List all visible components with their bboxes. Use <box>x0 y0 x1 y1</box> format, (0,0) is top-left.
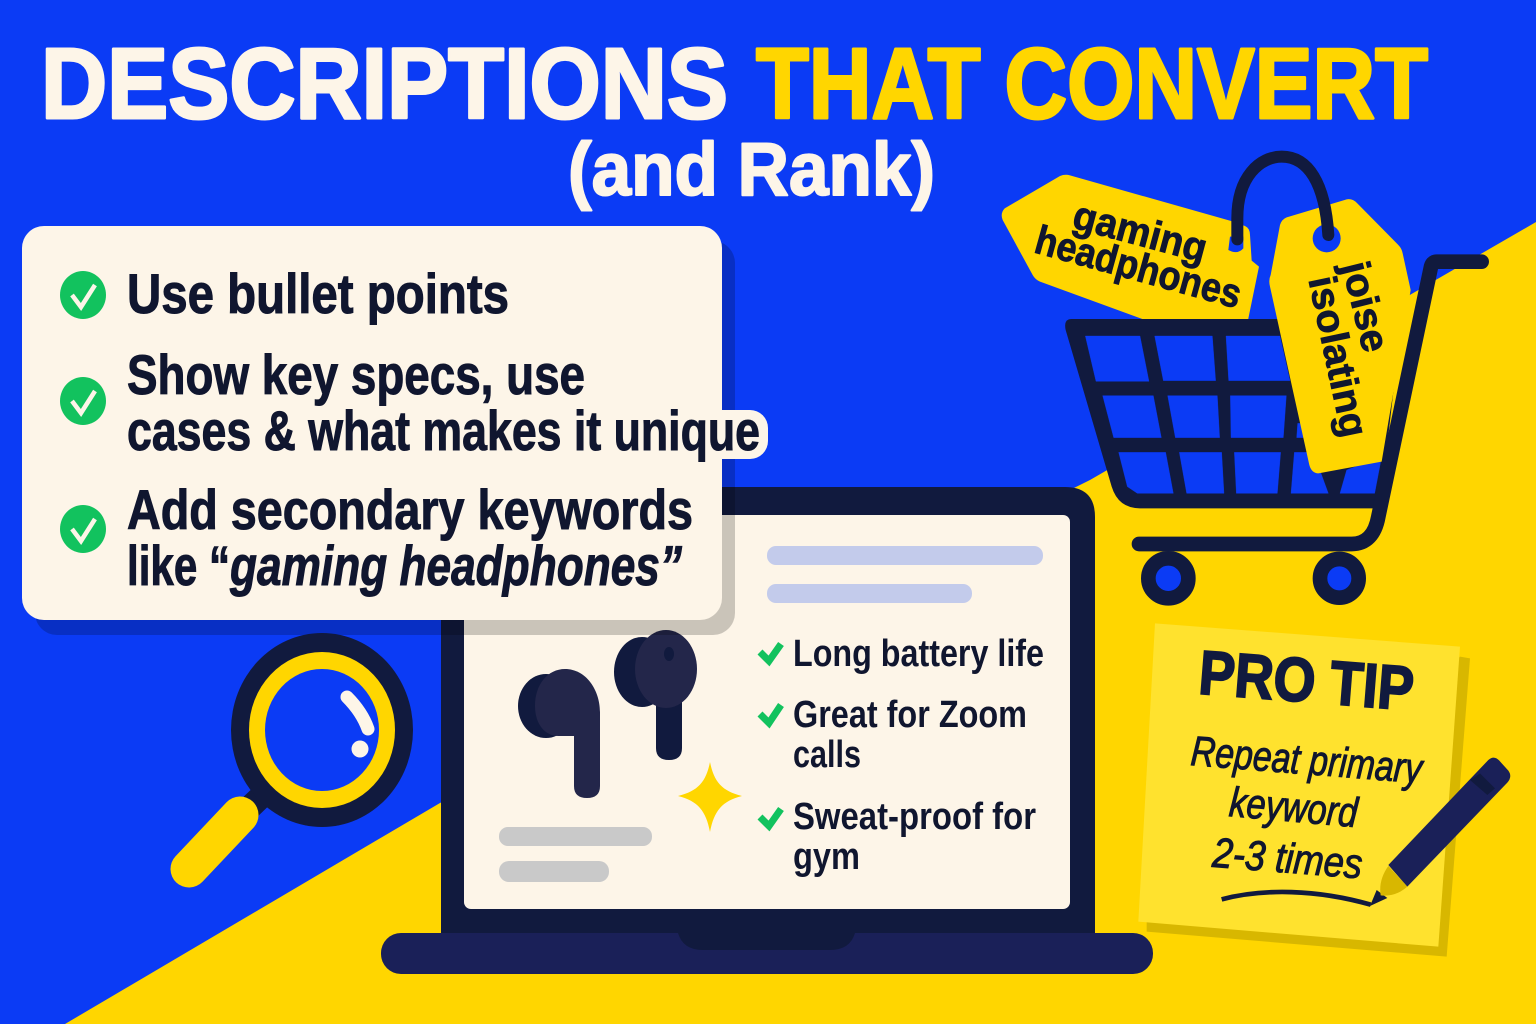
checklist text <box>127 262 768 597</box>
cart wheels <box>1148 558 1359 598</box>
feature list <box>760 633 1044 878</box>
placeholder headline bars <box>767 546 1043 603</box>
laptop <box>381 487 1153 974</box>
checklist text: Add secondary keywords <box>127 478 693 541</box>
tag: noise isolating: isolating <box>1300 272 1377 441</box>
checklist text: Use bullet points <box>127 262 509 325</box>
laptop base <box>381 933 1153 974</box>
feature list: gym <box>793 836 860 878</box>
checklist text: like “ <box>127 534 230 597</box>
checklist text: Show key specs, use <box>127 343 585 406</box>
check icons <box>60 271 106 553</box>
feature list: Sweat-proof for <box>793 796 1036 838</box>
checklist text: gaming headphones” <box>229 534 682 597</box>
tag: gaming headphones <box>1002 175 1259 327</box>
title: (and Rank) <box>568 127 935 211</box>
tag: noise isolating <box>1269 199 1411 473</box>
icon: pen <box>1370 758 1510 906</box>
panel: pro tip sticky note <box>1138 623 1510 957</box>
pro tip handwritten note: keyword <box>1228 778 1361 836</box>
title: THAT CONVERT <box>756 28 1428 140</box>
feature list: Great for Zoom <box>793 694 1027 736</box>
icon: sparkle <box>678 762 742 832</box>
laptop notch <box>678 933 855 950</box>
cart frame and handle <box>1139 262 1482 544</box>
feature list: Long battery life <box>793 633 1044 675</box>
shopping cart with tags <box>1002 157 1482 598</box>
title <box>41 28 1428 211</box>
tag: gaming headphones: headphones <box>1030 216 1247 317</box>
tag: noise isolating: joise <box>1333 256 1398 356</box>
cart basket <box>1065 319 1402 508</box>
pro tip handwritten note: Repeat primary <box>1189 727 1426 792</box>
icon: magnifying glass <box>189 633 413 869</box>
title: DESCRIPTIONS <box>41 28 728 140</box>
placeholder caption bars <box>499 827 652 882</box>
checklist text: cases & what makes it unique <box>127 399 760 462</box>
panel: checklist <box>22 226 768 635</box>
pro tip heading: PRO TIP <box>1197 639 1416 724</box>
tag string <box>1237 157 1328 239</box>
icon: earbuds <box>518 630 697 798</box>
tag: gaming headphones: gaming <box>1068 192 1212 271</box>
feature list: calls <box>793 734 861 776</box>
underline stroke <box>1222 892 1371 905</box>
pro tip handwritten note <box>1189 727 1426 887</box>
pro tip handwritten note: 2-3 times <box>1210 829 1364 887</box>
